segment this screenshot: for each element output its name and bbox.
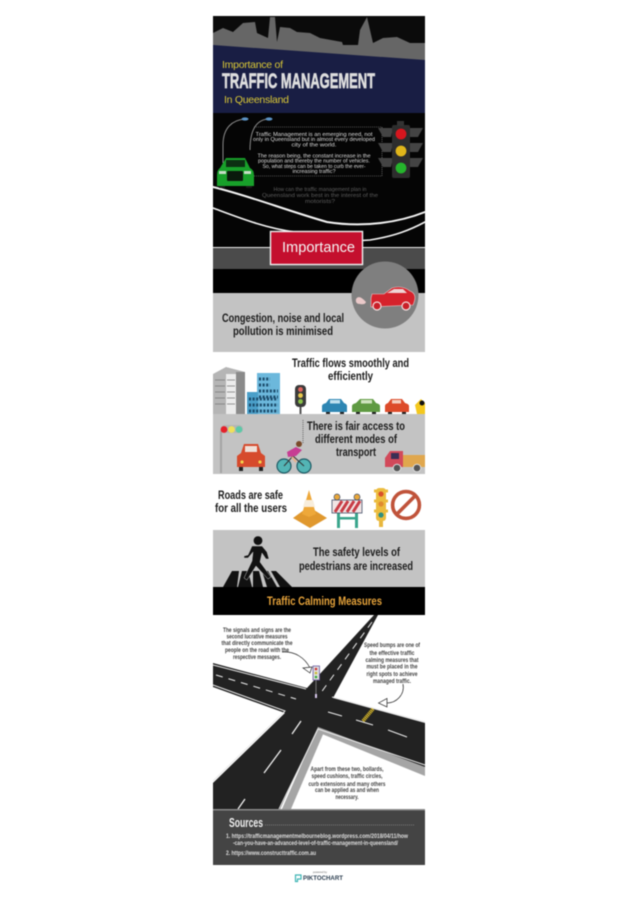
question text: motorists? xyxy=(305,199,335,205)
sources heading: Sources xyxy=(229,815,263,830)
speed bumps text: Speed bumps are one of xyxy=(364,643,421,649)
panel: title header xyxy=(213,16,425,114)
question text: Queensland work best in the interest of the xyxy=(262,193,378,199)
footer logo: powered by xyxy=(313,870,327,874)
panel: fair access: different modes of xyxy=(315,432,398,446)
other measures text: necessary. xyxy=(336,795,359,801)
icon: green car xyxy=(217,158,254,188)
title line one: Importance of xyxy=(222,59,283,71)
text: Roads are safe xyxy=(218,488,283,502)
other measures text: Apart from these two, bollards, xyxy=(310,767,384,773)
heading text: Traffic flows smoothly and xyxy=(292,356,409,370)
icon: traffic light xyxy=(295,385,306,414)
question text xyxy=(262,187,378,205)
intro paragraph xyxy=(253,132,375,175)
red heading box xyxy=(270,232,362,264)
text: Congestion, noise and local xyxy=(222,311,344,325)
dotted divider xyxy=(302,420,304,444)
speed bump xyxy=(363,709,373,721)
dotted text frame xyxy=(254,127,382,176)
intro paragraph: Traffic Management is an emerging need, not xyxy=(256,132,373,138)
other measures text: can be applied as and when xyxy=(315,788,379,794)
icon: street lights xyxy=(223,117,272,163)
text: The safety levels of xyxy=(313,545,401,559)
icon: yellow sign xyxy=(415,399,425,414)
icon: traffic cone xyxy=(293,490,327,528)
signals text: respective messages. xyxy=(233,655,281,661)
title line three: In Queensland xyxy=(224,94,289,106)
text: There is fair access to xyxy=(307,419,405,433)
icon: red car xyxy=(385,399,409,414)
icon: signal on pole xyxy=(220,425,243,473)
arrow to signal xyxy=(282,652,312,673)
panel: smooth traffic flow xyxy=(213,356,425,414)
icon: traffic light xyxy=(378,121,423,178)
icon: red car xyxy=(237,444,265,471)
panel: road safety xyxy=(215,488,419,528)
other measures text: curb extensions and many others xyxy=(308,782,386,788)
intro paragraph: increasing traffic? xyxy=(292,169,336,175)
icon: zebra crossing xyxy=(223,571,292,587)
panel: congestion xyxy=(213,262,425,352)
road edge lines xyxy=(213,665,425,809)
speed bumps text: the effective traffic xyxy=(370,651,415,657)
speed bumps text: right spots to achieve xyxy=(366,672,418,678)
panel: sources: 2. https://www.constructtraffic.com.au xyxy=(226,850,316,857)
arrow to speed bump xyxy=(378,684,403,707)
road surface xyxy=(213,615,425,809)
intro paragraph: population and thereby the number of vehicles. xyxy=(258,158,370,164)
heading: Traffic Calming Measures xyxy=(267,594,382,608)
icon: pedestrian xyxy=(244,536,271,580)
signals text xyxy=(222,628,293,661)
panel: sources xyxy=(213,809,425,865)
icon: no entry sign xyxy=(393,492,419,518)
footer logo xyxy=(296,870,343,882)
signals text: that directly communicate the xyxy=(222,641,293,647)
panel: smooth traffic flow: efficiently xyxy=(328,369,373,383)
icon: grey building xyxy=(213,367,245,414)
road dashes xyxy=(216,622,407,809)
signals text: second lucrative measures xyxy=(226,634,288,640)
icon: truck xyxy=(385,451,425,472)
panel: pedestrian safety xyxy=(213,530,425,587)
question text: How can the traffic management plan in xyxy=(274,187,366,193)
road shadows xyxy=(213,698,425,809)
road curves xyxy=(213,187,425,241)
intro paragraph: city of the world. xyxy=(292,142,336,148)
panel: road safety: for all the users xyxy=(215,501,287,515)
icon: barrier xyxy=(332,494,362,528)
main title: TRAFFIC MANAGEMENT xyxy=(222,70,375,93)
intro paragraph: only in Queensland but in almost every developed xyxy=(253,137,375,143)
icon: signal sign xyxy=(313,666,320,698)
other measures text: speed cushions, traffic circles, xyxy=(312,774,383,780)
icon: yellow signal xyxy=(374,488,388,527)
icon: circle with polluting car xyxy=(352,262,418,328)
navy title band xyxy=(213,45,425,113)
panel: sources: -can-you-have-an-advanced-level-of-traffic-management-in-queensland/ xyxy=(233,840,398,847)
other measures text xyxy=(308,767,386,801)
panel: congestion: pollution is minimised xyxy=(233,324,333,338)
speed bumps text: must be placed in the xyxy=(366,664,418,670)
panel: importance banner xyxy=(213,232,425,293)
panel: fair access xyxy=(213,414,425,474)
speed bumps text: calming measures that xyxy=(366,658,418,664)
panel: pedestrian safety: pedestrians are increased xyxy=(299,559,413,573)
panel: introduction xyxy=(213,113,425,248)
icon: blue buildings xyxy=(247,373,280,414)
panel: crossroads xyxy=(213,615,425,809)
logo wordmark: PIKTOCHART xyxy=(303,876,343,882)
icon: blue car xyxy=(322,399,347,414)
icon: logo mark xyxy=(296,875,301,882)
heading: Importance xyxy=(282,240,355,256)
intro paragraph: So, what steps can be taken to curb the ever- xyxy=(262,164,366,170)
signals text: people on the road with the xyxy=(225,648,290,654)
speed bumps text: managed traffic. xyxy=(373,679,411,685)
source list: 1. https://trafficmanagementmelbourneblog.wordpress.com/2018/04/11/how xyxy=(226,833,408,840)
skyline silhouette xyxy=(213,17,425,61)
icon: cyclist xyxy=(277,441,311,473)
panel: fair access: transport xyxy=(336,445,376,459)
signals text: The signals and signs are the xyxy=(223,628,292,634)
icon: green car xyxy=(352,399,380,414)
intro paragraph: The reason being, the constant increase in the xyxy=(258,154,371,160)
speed bumps text xyxy=(364,643,421,685)
panel: traffic calming heading xyxy=(213,587,425,615)
